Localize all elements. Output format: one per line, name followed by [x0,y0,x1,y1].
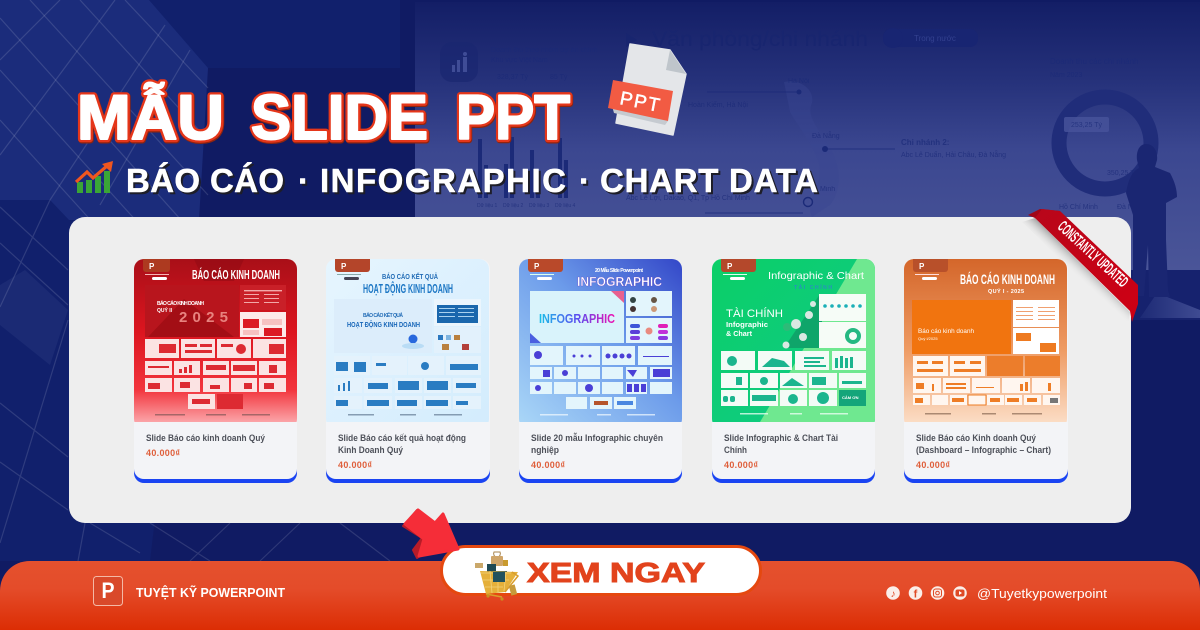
faded donut chart: Hồ Chí Minh [1059,202,1098,211]
faded map: Minh [820,186,835,193]
thumbnail: business results: P [341,262,347,271]
thumbnail: business results [326,259,490,422]
faded map: Abc Lê Lợi, Dakao, Q1, Tp Hồ Chí Minh [626,193,750,202]
card 2: blue business report [326,259,490,483]
thumbnail: infographic: 20 Mẫu Slide Powerpoint [595,267,643,274]
thumbnail: red report: 2025 [179,309,228,326]
subtitle: CHART DATA [602,164,820,201]
card price: 40.000₫ [916,460,950,470]
card price: 40.000₫ [146,448,180,458]
faded revenue chart block: Dữ liệu 2 [503,203,524,209]
title: MẪU SLIDE PPT: SLIDE [252,84,429,154]
button: XEM NGAY [442,546,760,601]
card title [531,433,663,455]
thumbnail: business results: BÁO CÁO KẾT QUẢ [382,271,438,281]
title: MẪU SLIDE PPT: PPT [456,83,570,153]
card price: 40.000₫ [338,460,372,470]
card title: Slide Báo cáo kết quả hoạt động [338,433,466,443]
thumbnail: orange report: QUÝ I - 2025 [988,288,1024,295]
thumbnail: infographic: INFOGRAPHIC [539,311,616,326]
stage floor [1131,270,1200,320]
thumbnail: red report: BÁO CÁO KINH DOANH [192,267,280,282]
thumbnail: orange report: Báo cáo kinh doanh [918,328,974,335]
thumbnail: business results: HOẠT ĐỘNG KINH DOANH [363,281,453,296]
thumbnail: orange report: BÁO CÁO KINH DOANH [960,271,1055,287]
faded donut chart: 350,25 Tỷ [1107,170,1139,177]
title: MẪU SLIDE PPT: SLIDE [251,83,428,153]
social icons [886,586,967,600]
faded heading: Văn phòng/chi nhánh [652,28,868,51]
subtitle: CHART DATA [600,162,818,199]
thumbnail: red report: BÁO CÁO KINH DOANH [157,300,204,307]
ribbon: constantly updated [1022,209,1138,325]
faded revenue chart block [440,42,598,209]
thumbnail: finance infographic: Infographic [726,320,768,329]
subtitle: BÁO CÁO [128,164,286,201]
icon: shopping cart [475,552,518,601]
social icons: ♪ [890,589,896,600]
faded revenue chart block: Doanh thu theo nhóm dự án chính [491,47,598,54]
social handle: @Tuyetkypowerpoint [977,586,1107,601]
icon: PPT file [608,44,686,135]
faded heading: Trong nước [914,34,956,43]
icon: PPT file: PPT [618,88,662,117]
card title [338,433,466,455]
subtitle: BÁO CÁO [126,162,284,199]
faded donut chart: Năm 2023 [1050,72,1082,79]
thumbnail: infographic: INFOGRAPHIC [577,274,663,289]
thumbnail: finance infographic: Infographic & Chart [768,270,864,282]
card title: Kinh Doanh Quý [338,445,403,455]
title: MẪU SLIDE PPT: MẪU [77,82,224,153]
thumbnail: finance infographic: TÀI CHÍNH [726,307,783,320]
card title: Slide Báo cáo kinh doanh Quý [146,433,265,443]
faded donut chart [1050,57,1151,211]
thumbnail: finance infographic [712,259,875,422]
subtitle [126,162,820,201]
faded revenue chart block: Dữ liệu 3 [529,203,550,209]
thumbnail: orange report: Quý I/2025 [918,336,938,341]
thumbnail: finance infographic: TÀI CHÍNH [794,283,832,291]
main panel [69,217,1131,523]
logo: Tuyệt Kỹ PowerPoint [94,576,122,606]
thumbnail: infographic [519,259,682,422]
thumbnail: finance infographic: P [727,262,733,271]
speaker silhouette [1126,144,1177,297]
thumbnail: business results: HOẠT ĐỘNG KINH DOANH [347,320,420,329]
card 4: green finance [712,259,875,483]
card 1: red report [134,259,297,483]
subtitle: INFOGRAPHIC [320,162,566,199]
thumbnail: finance infographic: & Chart [726,331,753,338]
title: MẪU SLIDE PPT [77,82,571,154]
title: MẪU SLIDE PPT: MẪU [77,82,224,153]
card title: Slide Báo cáo Kinh doanh Quý [916,433,1036,443]
faded heading [626,28,978,51]
faded map [626,78,1006,217]
faded donut chart: Doanh thu các chi nhánh [1050,57,1139,66]
button label: XEM NGAY [527,557,705,588]
faded donut chart: Đà Nẵng [1117,202,1145,211]
thumbnail: orange report [904,259,1068,422]
card 3: infographic [519,259,682,483]
faded revenue chart block: 328,37 Tỷ [497,74,529,81]
card title: Slide Infographic & Chart Tài [724,433,838,443]
thumbnail: business results: BÁO CÁO KẾT QUẢ [363,312,403,319]
card title: Chính [724,445,747,455]
card title: Slide 20 mẫu Infographic chuyên [531,433,663,443]
footer bar [0,561,1200,630]
faded revenue chart block: Dữ liệu 4 [555,203,576,209]
subtitle: INFOGRAPHIC [322,164,568,201]
brand name: TUYỆT KỸ POWERPOINT [136,585,285,600]
thumbnail: red report [134,259,297,422]
faded revenue chart block: Dữ liệu 1 [477,203,498,209]
title: MẪU SLIDE PPT: PPT [456,83,570,153]
card title [724,433,838,455]
subtitle: · [579,162,590,199]
card price: 40.000₫ [531,460,565,470]
logo: Tuyệt Kỹ PowerPoint: P [102,578,114,603]
card price: 40.000₫ [724,460,758,470]
faded revenue chart block: Khu vực Việt Nam [491,57,548,64]
thumbnail: infographic: P [534,262,540,271]
icon: growth chart [76,161,113,193]
thumbnail: red report: QUÝ II [157,307,173,314]
subtitle: · [581,164,592,201]
background: building with grid lines [0,0,400,561]
thumbnail: orange report: P [919,262,925,271]
card title: nghiệp [531,445,559,455]
faded map: Abc Lê Duẩn, Hải Châu, Đà Nẵng [901,150,1006,159]
faded donut chart: 253,25 Tỷ [1071,122,1103,129]
card title [916,433,1051,455]
subtitle: · [298,162,309,199]
thumbnail: finance infographic: CẢM ƠN [842,395,859,400]
title: MẪU SLIDE PPT: MẪU [78,83,225,154]
social icons: f [914,588,918,600]
title: MẪU SLIDE PPT: PPT [457,84,571,154]
faded map: Hà Nội [788,78,810,85]
faded map: Chi nhánh 2: [901,138,949,147]
title: MẪU SLIDE PPT: SLIDE [251,83,428,153]
faded revenue chart block: 85 Tỷ [550,74,568,81]
faded map: Hoàn Kiếm, Hà Nội [688,100,748,109]
thumbnail: red report: P [149,262,155,271]
arrow [403,510,458,558]
subtitle: · [300,164,311,201]
background: faded dashboard slide [415,2,1200,270]
card 5: orange dashboard [904,259,1068,483]
card title: (Dashboard – Infographic – Chart) [916,445,1051,455]
ribbon: constantly updated: CONSTANTLY UPDATED [1054,218,1131,291]
faded map: Đà Nẵng [812,131,840,140]
